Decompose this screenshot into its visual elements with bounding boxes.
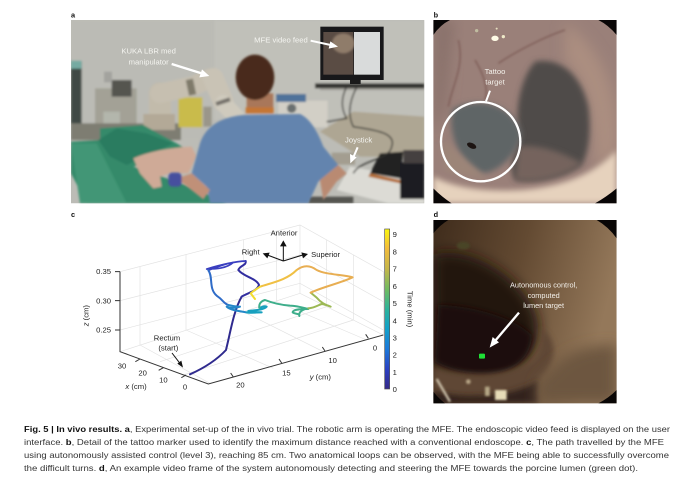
label line 2: computed [528,291,560,300]
endoscope unit [278,101,328,127]
target circle [441,102,520,181]
label: MFE video feed: MFE video feed [254,35,308,44]
photo d [433,220,617,403]
z ticks: 0.25 [96,325,111,334]
colourbar ticks: 3 [393,333,397,342]
tattoo mark [467,142,476,149]
glare [437,379,507,402]
annotation: rectum: (start) [158,343,179,352]
colourbar ticks: 1 [393,368,397,377]
axes [115,272,383,384]
z ticks: 30 [118,361,126,370]
label b: b [434,10,439,19]
drape [71,125,227,203]
z ticks: 0 [183,382,187,391]
glare [475,28,505,41]
compass labels: Superior [311,250,341,259]
colourbar ticks [393,230,398,394]
label a: a [71,10,76,19]
label: target: target [485,77,506,86]
arrow: joystick [353,147,358,157]
panel a: experimental set-up photo [71,10,424,203]
label: tattoo: Tattoo [485,67,505,76]
z ticks: 0.30 [96,296,111,305]
arrowhead [490,337,499,348]
panel d: autonomous lumen target [433,210,617,403]
axis titles: x (cm) [124,382,147,391]
monitor shelf [315,83,424,88]
pig [133,147,197,188]
photo a [71,20,424,203]
axis titles: y (cm) [309,372,331,381]
arrow: manipulator [172,64,202,73]
colourbar ticks: 4 [393,316,398,325]
monitor [320,27,384,84]
panel c: 3D path chart [71,210,414,394]
annotation: rectum [154,333,180,352]
grid walls [120,225,383,383]
label c: c [71,210,75,219]
caption line 4: the difficult turns. d, An example video frame of the system autonomously detecting and steering the MFE towards the porcine lumen (green dot). [24,463,638,473]
z ticks [96,267,377,391]
corners [433,220,617,403]
colourbar [385,229,390,389]
right counter wall [320,112,424,157]
compass labels: Anterior [271,229,298,238]
label: manipulator: manipulator [129,57,169,66]
arrowhead: joystick [350,154,357,163]
arrowhead: manipulator [199,69,209,77]
compass labels: Right [242,248,260,257]
robot arm [160,78,237,117]
axis titles: Time (min) [405,291,414,328]
trajectory [190,261,353,374]
compass labels [242,229,341,259]
label: joystick: Joystick [345,135,372,144]
caption line 3: using autonomously assisted control (level 3), reaching 85 cm. Two anatomical loops can be observed, with the MFE being able to successfully overcome [24,450,669,460]
colourbar ticks: 6 [393,282,397,291]
colourbar ticks: 9 [393,230,397,239]
compass arrowheads [263,240,308,258]
label line 1: Autonomous control, [510,281,577,290]
axis titles [82,291,414,391]
z ticks: 10 [328,356,337,365]
caption line 1: Fig. 5 | In vivo results. a , Experimental set-up of the in vivo trial. The robotic arm is operating the MFE. The endoscopic video feed is displayed on the user [24,424,670,434]
z ticks: 20 [236,381,245,390]
arrow shaft [495,313,519,341]
caption line 2: interface. b, Detail of the tattoo marker used to identify the maximum distance reached with a conventional endoscope. c, The path travelled by the MFE [24,437,664,447]
label line 3: lumen target [523,301,564,310]
colourbar ticks: 0 [393,385,397,394]
colourbar ticks: 7 [393,265,397,274]
caption [24,424,670,473]
axis titles: z (cm) [82,305,91,327]
colourbar ticks: 8 [393,247,397,256]
green dot [479,354,485,359]
z ticks: 10 [159,375,168,384]
pointer line [486,91,490,101]
label: KUKA: KUKA LBR med [121,47,176,56]
orientation compass [267,244,303,261]
z ticks: 20 [138,368,147,377]
annotation: rectum: Rectum [154,333,180,342]
photo b [433,20,618,203]
corners [433,20,617,203]
operator [168,55,347,203]
left equipment [71,67,83,125]
z ticks: 0.35 [96,267,111,276]
label d: d [434,210,438,219]
panel b: tattoo target [433,10,618,203]
colourbar ticks: 2 [393,351,397,360]
arrow: video feed [311,41,331,45]
colourbar ticks: 5 [393,299,397,308]
yellow bin [178,97,202,127]
arrow: rectum [172,353,183,368]
arrowhead: video feed [329,41,338,49]
z ticks: 0 [373,343,377,352]
table and right items [337,167,424,203]
z ticks: 15 [282,369,291,378]
